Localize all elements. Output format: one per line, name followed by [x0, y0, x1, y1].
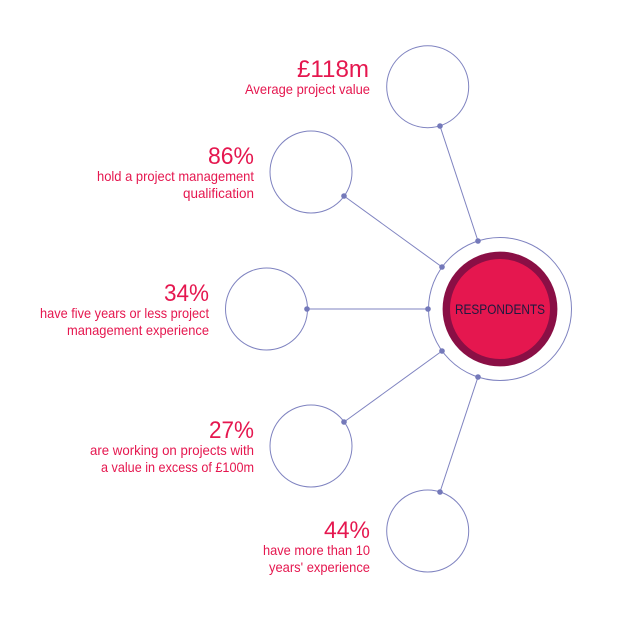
satellite: 34% five years or less: management experience	[67, 322, 209, 338]
satellite: average project value: £118m	[297, 56, 369, 83]
satellite: 44% more than 10 years	[263, 490, 469, 575]
satellite: 44% more than 10 years: have more than 10	[263, 542, 370, 558]
satellite: 27% over £100m: a value in excess of £100m	[101, 459, 254, 475]
central respondents hub	[428, 238, 572, 380]
satellite: 44% more than 10 years: years' experience	[269, 559, 370, 575]
satellite: 27% over £100m: 27%	[209, 417, 254, 444]
satellite: 86% qualification: qualification	[183, 185, 254, 201]
connector lines	[307, 126, 478, 492]
satellite: 27% over £100m	[90, 405, 352, 487]
satellite: 27% over £100m: are working on projects with	[90, 442, 254, 458]
satellite: 34% five years or less: 34%	[164, 280, 209, 307]
satellite: 44% more than 10 years: 44%	[324, 517, 370, 544]
satellite: 86% qualification	[97, 131, 352, 213]
satellite: 86% qualification: 86%	[208, 143, 254, 170]
satellite: average project value	[245, 46, 469, 128]
connector dots	[304, 123, 481, 495]
satellite: 34% five years or less	[40, 268, 308, 350]
satellite: 86% qualification: hold a project management	[97, 168, 254, 184]
satellite: average project value: Average project value	[245, 81, 370, 97]
satellite: 34% five years or less: have five years or less project	[40, 305, 209, 321]
central respondents hub: RESPONDENTS	[455, 301, 545, 317]
